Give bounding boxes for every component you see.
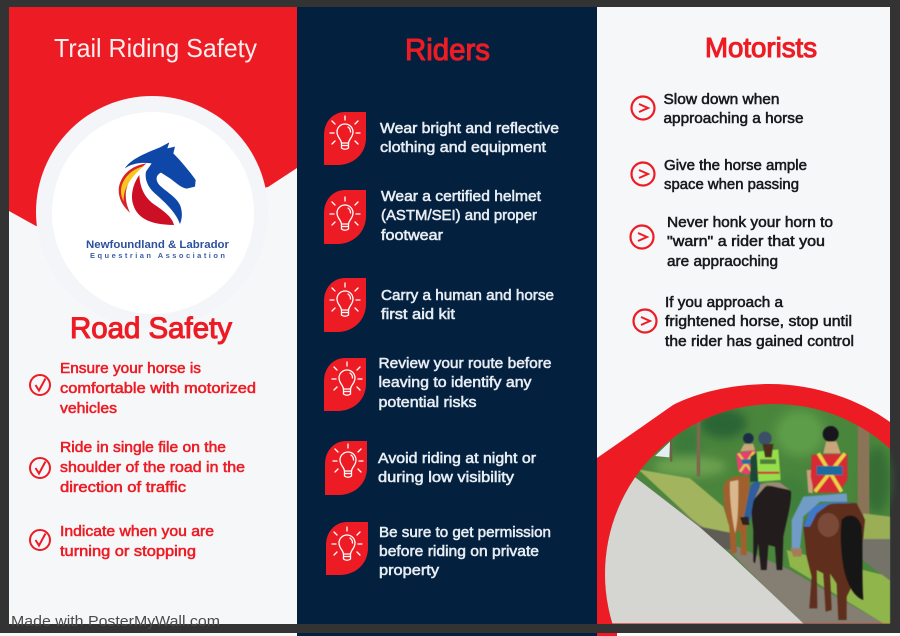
road safety item 2: direction of traffic: [60, 479, 187, 496]
heading: motorists: Motorists: [705, 32, 817, 63]
motorist tip 3: are appraoching: [667, 253, 778, 270]
title: Trail Riding Safety: [54, 33, 257, 63]
photo: riders on roadside: [590, 400, 890, 623]
rider tip 1: [324, 112, 559, 165]
road safety item 2: [30, 439, 245, 496]
rider tip 6: Be sure to get permission: [379, 524, 551, 541]
logo: [52, 112, 254, 314]
heading: riders: Riders: [405, 32, 490, 67]
bottom dark band: [0, 624, 900, 633]
motorist tip 1: approaching a horse: [664, 110, 804, 127]
rider 2: [740, 432, 791, 570]
trees: [653, 408, 890, 517]
logo: Equestrian Association: [90, 251, 225, 260]
motorist tip 2: Give the horse ample: [664, 157, 807, 174]
motorist tip 1: Slow down when: [664, 91, 780, 108]
rider tip 1: Wear bright and reflective: [380, 120, 559, 137]
road safety item 1: [30, 360, 256, 417]
road safety item 3: Indicate when you are: [60, 523, 214, 540]
motorist tip 4: If you approach a: [665, 294, 784, 311]
road safety item 1: comfortable with motorized: [60, 380, 256, 397]
rider tip 4: [324, 355, 552, 411]
motorist tip 3: [630, 214, 833, 270]
rider tip 6: property: [379, 562, 440, 579]
rider tip 2: footwear: [381, 227, 443, 244]
panel: left column: [9, 7, 297, 624]
motorist tip 1: [632, 91, 804, 127]
rider tip 5: during low visibility: [378, 469, 515, 486]
logo outer ring: [36, 96, 268, 328]
rider tip 3: Carry a human and horse: [381, 287, 554, 304]
sky: [655, 442, 670, 457]
rider tip 1: clothing and equipment: [380, 139, 547, 156]
rider tip 4: Review your route before: [378, 355, 552, 372]
road safety item 1: vehicles: [60, 400, 117, 417]
rider 3: [790, 426, 865, 620]
icon: horse head: [119, 142, 196, 225]
panel: motorists: [590, 7, 890, 624]
gravel shoulder: [637, 477, 883, 623]
rider tip 3: first aid kit: [381, 306, 456, 323]
rider tip 2: (ASTM/SEI) and proper: [381, 207, 537, 224]
motorist tip 2: space when passing: [664, 176, 799, 193]
rider tip 2: [324, 188, 542, 244]
rider tip 4: leaving to identify any: [378, 374, 532, 391]
rider tip 6: [326, 522, 551, 579]
motorist tip 4: frightened horse, stop until: [665, 313, 852, 330]
rider tip 4: potential risks: [378, 394, 476, 411]
road safety item 3: [30, 523, 214, 560]
heading: road safety: Road Safety: [70, 312, 232, 345]
motorist tip 3: "warn" a rider that you: [667, 233, 825, 250]
poles: [697, 420, 700, 477]
grass verge: [637, 469, 890, 623]
rider tip 6: before riding on private: [379, 543, 539, 560]
road safety item 2: shoulder of the road in the: [60, 459, 245, 476]
strip below band: [0, 633, 900, 636]
rider 1: [723, 433, 756, 555]
road safety item 1: Ensure your horse is: [60, 360, 201, 377]
back road: [860, 539, 890, 581]
motorist tip 4: [634, 294, 854, 350]
horses and riders: [723, 426, 865, 620]
red arc behind photo: [597, 384, 890, 624]
motorist tip 3: Never honk your horn to: [667, 214, 833, 231]
motorist tip 4: the rider has gained control: [665, 333, 854, 350]
road: [605, 477, 804, 624]
rider tip 2: Wear a certified helmet: [381, 188, 542, 205]
watermark: Made with PosterMyWall.com: [11, 613, 220, 630]
rider tip 5: [325, 441, 536, 495]
rider tip 3: [324, 278, 554, 332]
motorist tip 2: [632, 157, 807, 193]
logo text: Newfoundland & Labrador: [86, 239, 230, 251]
road safety item 2: Ride in single file on the: [60, 439, 226, 456]
panel: riders: [297, 7, 597, 624]
rider tip 5: Avoid riding at night or: [378, 450, 536, 467]
red header shape: [9, 7, 297, 230]
road safety item 3: turning or stopping: [60, 543, 196, 560]
